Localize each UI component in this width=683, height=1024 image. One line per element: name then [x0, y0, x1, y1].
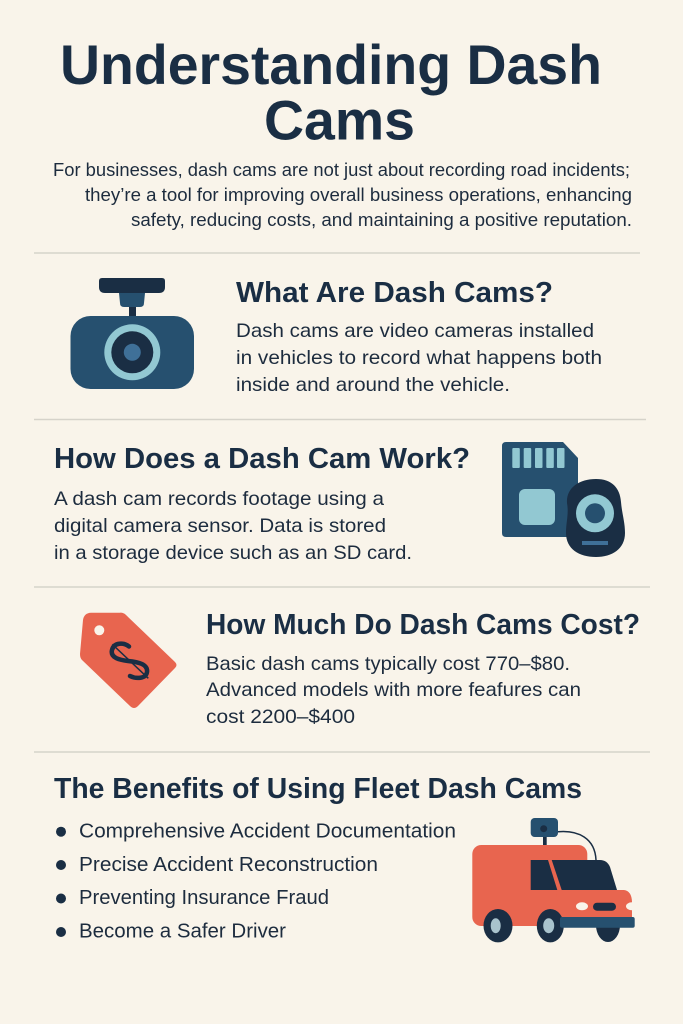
text: how does a dash cam work: in a storage device such as an SD card. [54, 542, 412, 564]
text: how much do dash cams cost [206, 653, 581, 728]
icon: SD card and camera [502, 442, 625, 557]
heading: benefits: The Benefits of Using Fleet Dash Cams [54, 773, 582, 805]
heading: how does a dash cam work: How Does a Dash Cam Work? [54, 443, 470, 475]
panel: how does a dash cam work [54, 442, 625, 564]
text: how much do dash cams cost: Basic dash cams typically cost 770–$80. [206, 653, 570, 675]
text: how does a dash cam work: digital camera sensor. Data is stored [54, 515, 386, 537]
intro text: For businesses, dash cams are not just about recording road incidents; [53, 159, 630, 180]
intro text: they’re a tool for improving overall business operations, enhancing [85, 184, 632, 205]
heading: how much do dash cams cost: How Much Do Dash Cams Cost? [206, 609, 640, 641]
text: what are dash cams: Dash cams are video cameras installed [236, 320, 594, 342]
text: how much do dash cams cost: cost 2200–$400 [206, 706, 355, 728]
text: what are dash cams: in vehicles to record what happens both [236, 347, 602, 369]
panel: what are dash cams [70, 277, 602, 396]
bullet list: benefits: Become a Safer Driver [79, 920, 286, 942]
text: what are dash cams [236, 320, 602, 396]
bullet list: benefits: Comprehensive Accident Documentation [79, 820, 456, 842]
icon: delivery van with camera [472, 818, 638, 942]
icon: dash camera [70, 278, 194, 389]
icon: price tag [80, 613, 176, 708]
bullet list: benefits [56, 820, 456, 942]
bullet list: benefits: Preventing Insurance Fraud [79, 887, 329, 909]
title: Cams [264, 88, 415, 152]
title [60, 33, 602, 152]
bullet list: benefits: Precise Accident Reconstruction [79, 854, 378, 876]
text: how does a dash cam work [54, 488, 412, 564]
panel: benefits of fleet dash cams [54, 773, 638, 942]
text: what are dash cams: inside and around the vehicle. [236, 374, 510, 396]
text: how does a dash cam work: A dash cam records footage using a [54, 488, 384, 510]
heading: what are dash cams: What Are Dash Cams? [236, 277, 553, 309]
panel: how much do dash cams cost [80, 609, 640, 728]
intro text: safety, reducing costs, and maintaining a positive reputation. [131, 209, 632, 230]
intro text [53, 159, 632, 230]
title: Understanding Dash [60, 33, 602, 96]
text: how much do dash cams cost: Advanced models with more feafures can [206, 679, 581, 701]
